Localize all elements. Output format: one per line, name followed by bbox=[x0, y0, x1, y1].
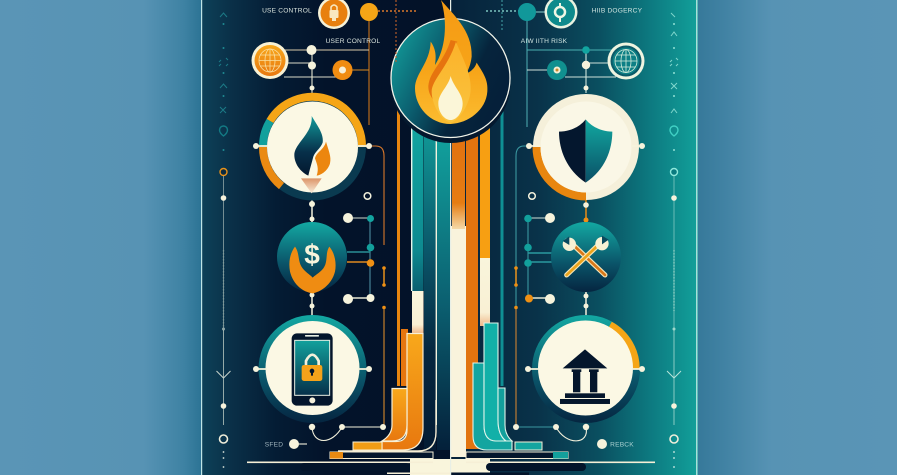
right top labels bbox=[521, 8, 643, 448]
medallion: flame icon bbox=[253, 94, 372, 200]
left orange bars bbox=[338, 329, 436, 451]
left long orange line bbox=[397, 108, 400, 386]
icon: padlock bbox=[302, 355, 322, 381]
left top labels bbox=[262, 8, 381, 448]
right orange column bbox=[466, 125, 486, 449]
medallion: bank icon bbox=[525, 315, 645, 423]
icon: teal globe bbox=[608, 42, 644, 80]
icon: small flame bbox=[294, 116, 330, 193]
central column chart bbox=[247, 108, 655, 475]
icon: crossed wrenches bbox=[563, 236, 609, 275]
medallion: phone lock bbox=[253, 315, 372, 423]
icon: flame bbox=[415, 0, 487, 124]
label: user control: USER CONTROL bbox=[326, 38, 381, 45]
left dark column bbox=[424, 125, 436, 450]
left edge ornaments bbox=[216, 13, 230, 468]
icon: orange hands bbox=[289, 247, 336, 293]
panel: poster bbox=[201, 0, 698, 475]
coloured nodes left bbox=[367, 215, 386, 309]
icon: shield bbox=[559, 119, 612, 183]
icon: bank building bbox=[560, 349, 610, 404]
icon: phone bbox=[292, 333, 333, 406]
label: aiw iith risk: AIW IITH RISK bbox=[521, 38, 568, 45]
medallion: dollar icon bbox=[277, 222, 347, 293]
left cream column bbox=[412, 291, 424, 333]
orange target node bbox=[332, 60, 352, 80]
right cream column bbox=[480, 258, 490, 326]
icon: dollar sign: $ bbox=[304, 239, 320, 270]
small nodes left bbox=[289, 45, 386, 449]
icon: target badge bbox=[544, 0, 578, 28]
right light orange column bbox=[480, 125, 490, 258]
teal node top bbox=[518, 3, 536, 21]
right dark-orange column bbox=[452, 125, 465, 229]
centre divider line bbox=[450, 0, 451, 475]
label: sfed: SFED bbox=[265, 442, 283, 448]
right edge ornaments bbox=[667, 13, 681, 468]
coloured nodes right bbox=[514, 46, 590, 309]
small nodes right bbox=[513, 61, 607, 449]
left gradient column bbox=[437, 125, 450, 450]
orange node top bbox=[360, 3, 378, 21]
left connectors bbox=[284, 0, 416, 444]
teal target node bbox=[547, 60, 567, 80]
medallion: wrenches icon bbox=[551, 222, 621, 292]
bottom base bars bbox=[247, 452, 655, 475]
left teal column bbox=[412, 125, 424, 291]
centre cream column bbox=[451, 226, 466, 457]
medallion: shield icon bbox=[526, 94, 645, 200]
icon: lock badge bbox=[318, 0, 350, 29]
central flame medallion bbox=[390, 0, 510, 143]
label: use control: USE CONTROL bbox=[262, 8, 312, 14]
right connectors bbox=[486, 0, 616, 441]
ring node left bbox=[364, 193, 371, 199]
icon: orange globe bbox=[252, 42, 288, 79]
label: hiib dogercy: HIIB DOGERCY bbox=[592, 8, 643, 14]
ring node right bbox=[529, 193, 535, 199]
right long teal line bbox=[500, 108, 504, 386]
right teal bars bbox=[473, 323, 542, 450]
label: rebck: REBCK bbox=[610, 442, 634, 448]
